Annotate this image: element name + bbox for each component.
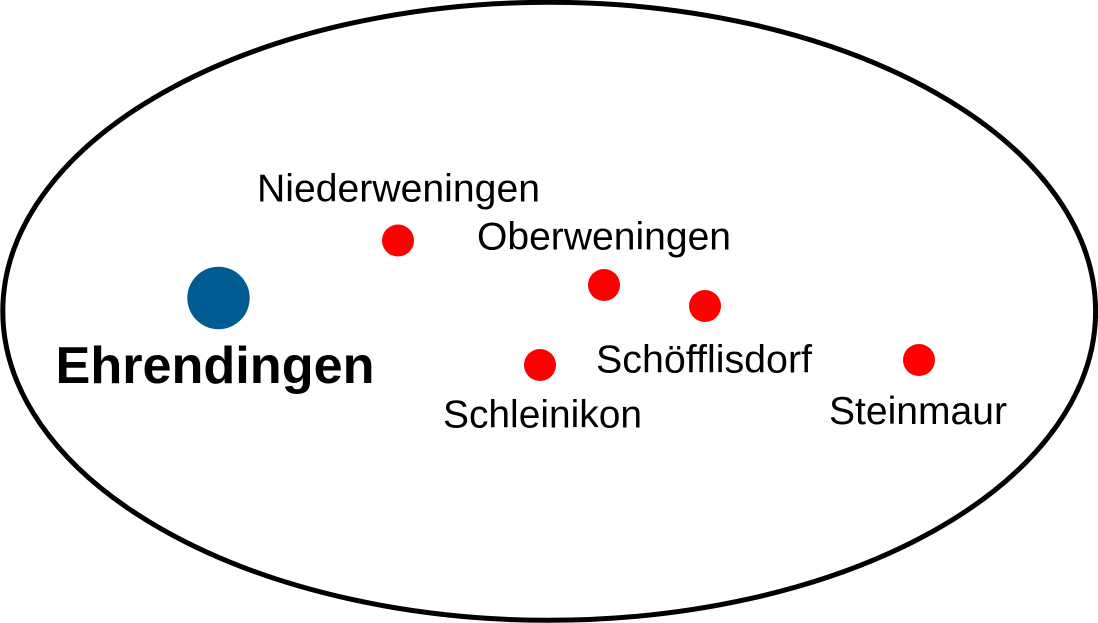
label: Steinmaur: Steinmaur bbox=[829, 390, 1007, 433]
marker: Oberweningen bbox=[588, 269, 620, 301]
label: Niederweningen: Niederweningen bbox=[257, 168, 540, 210]
label: Oberweningen: Oberweningen bbox=[477, 216, 731, 258]
marker: Schleinikon bbox=[524, 349, 556, 381]
label: Ehrendingen: Ehrendingen bbox=[56, 337, 374, 395]
label: Schöfflisdorf: Schöfflisdorf bbox=[596, 338, 812, 382]
marker: Schöfflisdorf bbox=[689, 290, 721, 322]
label: Schleinikon: Schleinikon bbox=[443, 394, 642, 436]
marker: Niederweningen bbox=[382, 224, 414, 256]
marker: Steinmaur bbox=[903, 344, 935, 376]
marker: Ehrendingen bbox=[187, 267, 250, 329]
